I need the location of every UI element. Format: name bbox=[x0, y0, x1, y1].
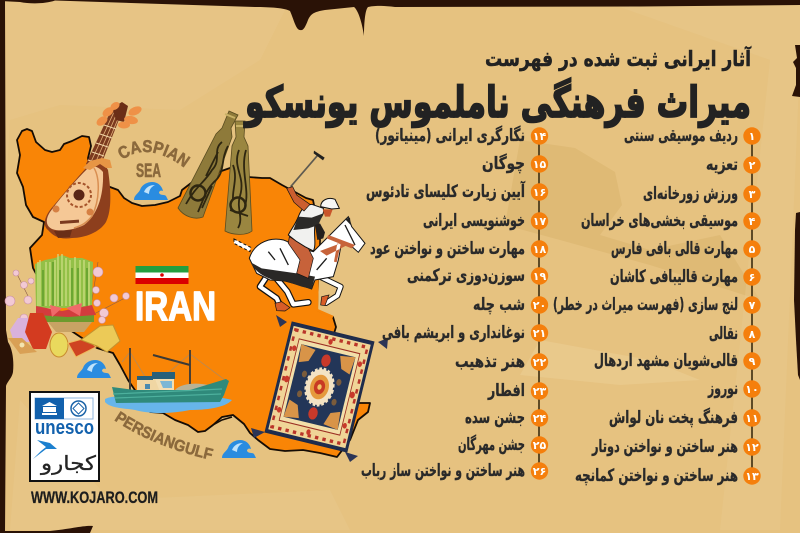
icon: zurkhaneh clubs bbox=[178, 111, 252, 234]
iran flag bbox=[136, 266, 188, 284]
list: items 14 to 26: ۱۴ bbox=[533, 130, 546, 143]
icon: Caspian wave bbox=[134, 182, 168, 200]
list: items 1 to 13: ۵ bbox=[749, 243, 756, 256]
list: items 14 to 26: ۱۵ bbox=[533, 158, 546, 171]
list: items 1 to 13: فرهنگ پخت نان لواش bbox=[609, 407, 738, 428]
icon: oud instrument bbox=[45, 100, 143, 239]
list: items 14 to 26: هنر تذهیب bbox=[455, 352, 525, 372]
list: items 14 to 26: ۱۹ bbox=[533, 270, 546, 283]
list: items 1 to 13: مهارت قالیبافی کاشان bbox=[610, 267, 738, 287]
list: items 14 to 26: ۲۱ bbox=[533, 327, 546, 340]
list: items 1 to 13: ۶ bbox=[749, 271, 755, 284]
list: items 14 to 26: مهارت ساختن و نواختن عود bbox=[370, 239, 525, 259]
list: items 14 to 26: آیین زیارت کلیسای تادئوس bbox=[366, 180, 526, 202]
list: items 1 to 13: ۱۲ bbox=[745, 441, 759, 454]
list: items 1 to 13: ۱ bbox=[749, 130, 755, 143]
label: Persian Gulf: PERSIANGULF bbox=[114, 411, 214, 459]
list: items 14 to 26: افطار bbox=[487, 381, 525, 401]
logo box: unesco and kojaro: unesco bbox=[35, 417, 94, 439]
heading bbox=[244, 46, 752, 128]
list: items 1 to 13: تعزیه bbox=[706, 155, 738, 175]
logo box: unesco and kojaro bbox=[30, 392, 99, 481]
list: items 14 to 26: ۲۴ bbox=[533, 412, 546, 425]
label: Caspian Sea: CASPIAN bbox=[118, 140, 191, 168]
list: items 1 to 13: نوروز bbox=[707, 379, 738, 399]
list: items 1 to 13: ورزش زورخانه‌ای bbox=[643, 184, 738, 204]
list: items 14 to 26: جشن مهرگان bbox=[458, 434, 525, 455]
list: items 1 to 13: ۸ bbox=[749, 328, 756, 341]
list: items 14 to 26: ۲۶ bbox=[533, 465, 546, 478]
list: items 14 to 26: شب چله bbox=[473, 295, 525, 315]
list: items 14 to 26: چوگان bbox=[482, 153, 525, 174]
list: items 14 to 26: خوشنویسی ایرانی bbox=[423, 211, 525, 231]
list: items 14 to 26: سوزن‌دوزی ترکمنی bbox=[407, 266, 525, 286]
list: items 1 to 13: ۴ bbox=[749, 215, 756, 228]
list: items 1 to 13: ۲ bbox=[749, 159, 756, 172]
carpet bbox=[251, 315, 388, 462]
list: items 14 to 26: ۱۶ bbox=[533, 186, 546, 199]
icon: gulf wave bbox=[222, 440, 256, 458]
haftseen: sabzeh and sweets bbox=[5, 254, 130, 357]
list: items 14 to 26: ۱۸ bbox=[533, 243, 546, 256]
list: items 14 to 26: ۲۳ bbox=[533, 385, 546, 398]
map of Iran bbox=[17, 129, 370, 457]
label: IRAN: IRAN bbox=[135, 283, 216, 329]
list: items 14 to 26: جشن سده bbox=[465, 408, 525, 428]
icon: polo player on horse bbox=[234, 151, 365, 311]
list: items 1 to 13: ردیف موسیقی سنتی bbox=[624, 126, 738, 146]
label: Caspian Sea bbox=[118, 140, 191, 182]
list: items 14 to 26: ۲۵ bbox=[533, 439, 546, 452]
list: items 1 to 13: ۱۳ bbox=[745, 470, 759, 483]
list: items 1 to 13: ۳ bbox=[749, 188, 756, 201]
list: items 1 to 13: نقالی bbox=[709, 324, 738, 344]
website address: WWW.KOJARO.COM bbox=[31, 488, 158, 507]
label: Caspian Sea: SEA bbox=[136, 161, 161, 182]
list: items 1 to 13: ۹ bbox=[749, 355, 756, 368]
list: items 14 to 26: ۱۷ bbox=[533, 215, 546, 228]
list: items 1 to 13: ۱۰ bbox=[745, 383, 759, 396]
list: items 14 to 26: ۲۰ bbox=[533, 299, 546, 312]
list: items 1 to 13 bbox=[553, 126, 761, 486]
list: items 1 to 13: ۱۱ bbox=[745, 412, 759, 425]
list: items 14 to 26: هنر ساختن و نواختن ساز رباب bbox=[361, 461, 525, 481]
icon: gulf wave west bbox=[77, 360, 111, 378]
list: items 1 to 13: ۷ bbox=[749, 299, 756, 312]
list: items 14 to 26 bbox=[361, 125, 548, 481]
logo box: unesco and kojaro: کجارو bbox=[40, 451, 97, 475]
icon: fishing boat bbox=[105, 348, 232, 413]
list: items 14 to 26: نگارگری ایرانی (مینیاتور) bbox=[375, 125, 525, 146]
list: items 14 to 26: نوغانداری و ابریشم بافی bbox=[382, 323, 525, 343]
list: items 14 to 26: ۲۲ bbox=[533, 356, 546, 369]
